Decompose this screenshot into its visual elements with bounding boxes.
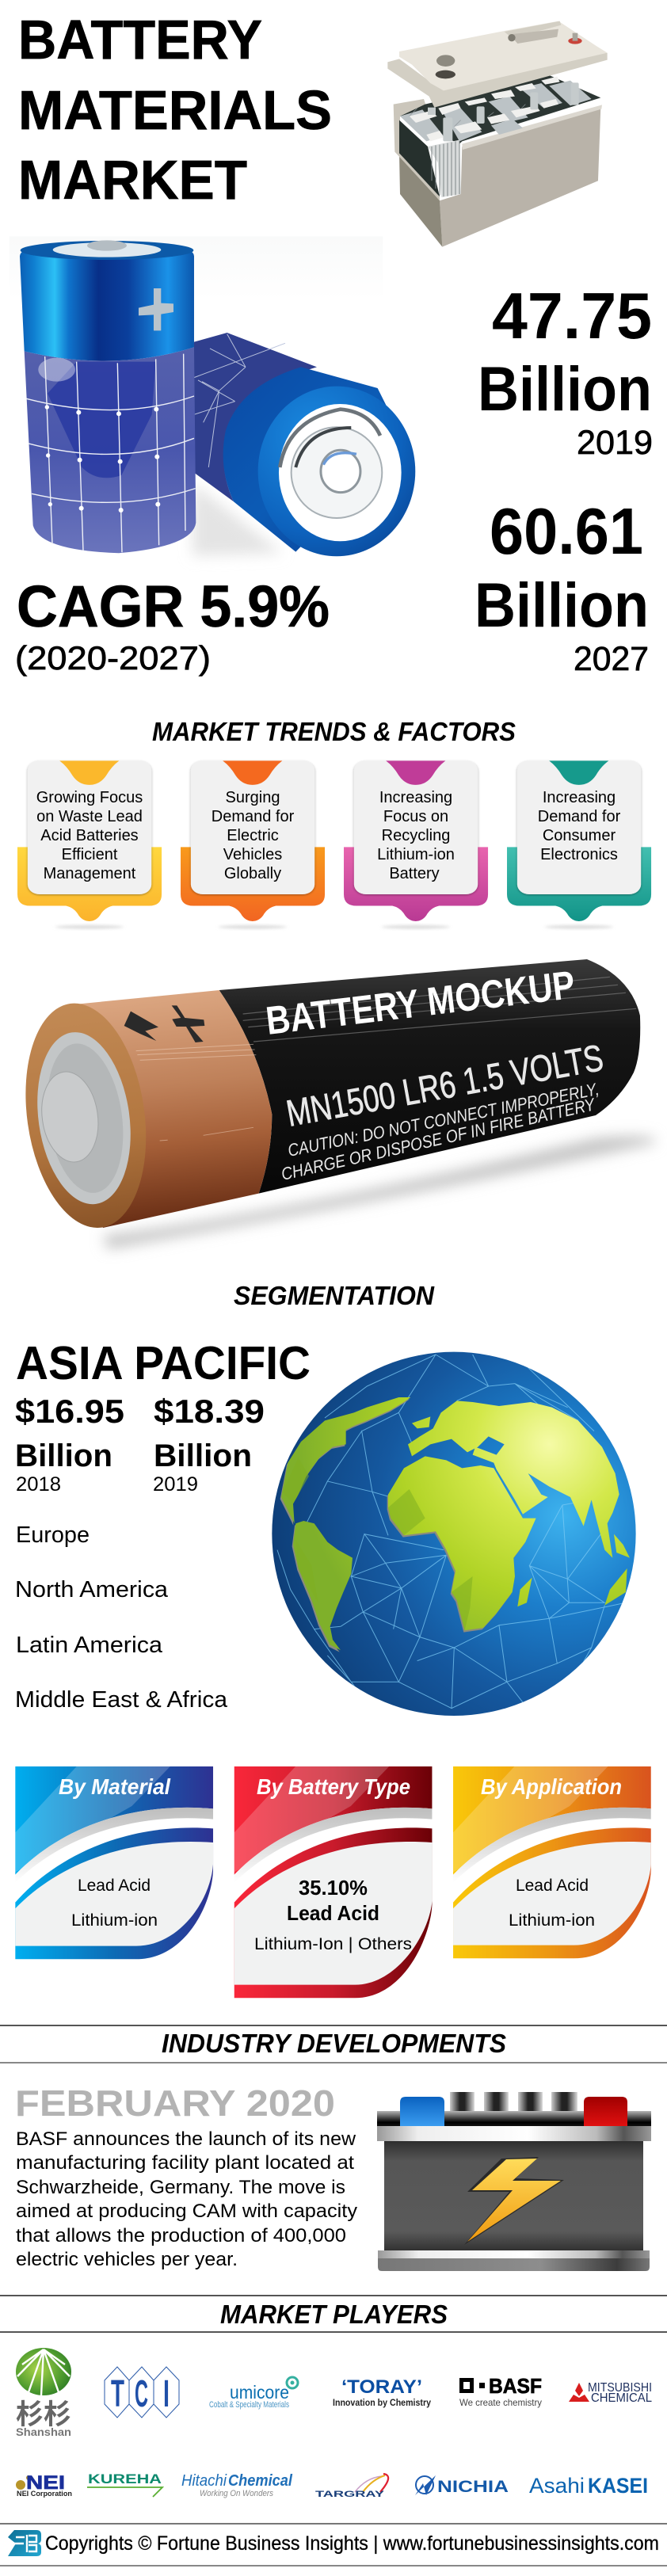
card: consumer electronics: Increasing bbox=[543, 789, 616, 806]
panel: by material: Lithium-ion bbox=[71, 1911, 158, 1930]
text block: BASF development: Schwarzheide, Germany. The move is bbox=[16, 2177, 345, 2198]
logo: NEI Corporation: NEI Corporation bbox=[17, 2490, 72, 2498]
card: recycling lithium-ion: Recycling bbox=[382, 827, 450, 844]
logo: TCI: C bbox=[135, 2373, 148, 2415]
logo: TCI: I bbox=[163, 2373, 170, 2415]
CAGR bbox=[15, 574, 330, 676]
date: February 2020: FEBRUARY 2020 bbox=[15, 2083, 335, 2124]
market size 2027 bbox=[475, 494, 649, 678]
logo: TCI bbox=[105, 2367, 179, 2418]
CAGR: (2020-2027) bbox=[15, 639, 211, 676]
logo: Hitachi Chemical: Working On Wonders bbox=[200, 2489, 273, 2498]
panel: by application: Lithium-ion bbox=[509, 1911, 595, 1930]
continents bbox=[281, 1397, 630, 1650]
text block: BASF development: that allows the production of 400,000 bbox=[16, 2225, 346, 2246]
text block: BASF development bbox=[16, 2128, 357, 2270]
panel: by battery type: 35.10% bbox=[299, 1876, 368, 1900]
illustration: AA battery mockup: CAUTION: DO NOT CONNECT IMPROPERLY, bbox=[286, 1079, 600, 1160]
card: recycling lithium-ion: Focus on bbox=[383, 808, 448, 825]
logo: Asahi Kasei bbox=[529, 2474, 648, 2498]
card: consumer electronics: Consumer bbox=[543, 827, 616, 844]
heading: industry developments: INDUSTRY DEVELOPMENTS bbox=[162, 2029, 506, 2058]
icon: minus and plus marks bbox=[124, 1005, 204, 1042]
text block: BASF development: BASF announces the launch of its new bbox=[16, 2128, 356, 2150]
logo: BASF bbox=[459, 2374, 542, 2408]
card: consumer electronics: Electronics bbox=[540, 846, 618, 863]
logo: TCI: T bbox=[111, 2373, 124, 2415]
panel: Asia Pacific figures: Billion bbox=[154, 1439, 252, 1473]
panel: by battery type: By Battery Type bbox=[257, 1774, 410, 1799]
text block: BASF development: electric vehicles per year. bbox=[16, 2249, 238, 2270]
logo: Shanshan: 杉杉 bbox=[16, 2399, 71, 2430]
logo: Hitachi Chemical: Hitachi bbox=[181, 2472, 227, 2490]
panel: Asia Pacific figures: 2018 bbox=[16, 1473, 61, 1496]
right lying battery bbox=[194, 333, 415, 556]
card: waste lead acid: Management bbox=[44, 865, 136, 882]
panel: trend cards bbox=[17, 760, 651, 929]
logo: BASF: We create chemistry bbox=[459, 2397, 542, 2408]
card: waste lead acid: Acid Batteries bbox=[40, 827, 139, 844]
left standing battery bbox=[20, 240, 196, 553]
illustration: AA battery mockup: BATTERY MOCKUP bbox=[264, 962, 577, 1043]
list: other regions: Middle East & Africa bbox=[15, 1687, 228, 1713]
logo: Shanshan: Shanshan bbox=[16, 2425, 71, 2438]
logo: Asahi Kasei: Asahi bbox=[529, 2474, 585, 2498]
logo: Kureha bbox=[87, 2471, 162, 2497]
title: MATERIALS bbox=[18, 79, 332, 141]
battery plates bbox=[400, 77, 592, 197]
card: consumer electronics bbox=[507, 760, 651, 929]
card: electric vehicles: Vehicles bbox=[223, 846, 282, 863]
logo: Hitachi Chemical: Chemical bbox=[228, 2472, 292, 2490]
CAGR: CAGR 5.9% bbox=[17, 574, 330, 639]
panel: Asia Pacific figures: ASIA PACIFIC bbox=[16, 1337, 311, 1389]
panel: by application: By Application bbox=[481, 1774, 622, 1799]
panel: Asia Pacific figures: $16.95 bbox=[15, 1393, 124, 1430]
card: waste lead acid: Efficient bbox=[62, 846, 118, 863]
logo: NEI Corporation: NEI bbox=[26, 2472, 65, 2494]
battery cover bbox=[387, 53, 608, 108]
icon: plus sign bbox=[139, 288, 173, 330]
text block: BASF development: manufacturing facility plant located at bbox=[16, 2152, 354, 2174]
heading: market trends and factors: MARKET TRENDS & FACTORS bbox=[152, 717, 516, 746]
card: waste lead acid bbox=[17, 760, 162, 929]
heading: market players: MARKET PLAYERS bbox=[220, 2300, 448, 2329]
logo: BASF: BASF bbox=[489, 2374, 542, 2398]
card: electric vehicles: Demand for bbox=[212, 808, 295, 825]
panel: by battery type: Lead Acid bbox=[287, 1901, 379, 1925]
logo: Nichia: NICHIA bbox=[437, 2478, 509, 2496]
title bbox=[18, 9, 332, 211]
logo: Mitsubishi Chemical: CHEMICAL bbox=[591, 2391, 652, 2405]
icon: car battery with lightning bolt bbox=[377, 2092, 651, 2271]
list: other regions: Europe bbox=[16, 1522, 90, 1548]
list: other regions: North America bbox=[15, 1577, 169, 1602]
logo: umicore bbox=[209, 2377, 298, 2410]
card: recycling lithium-ion bbox=[344, 760, 488, 929]
panel: by application: Lead Acid bbox=[516, 1877, 589, 1895]
footer logo bbox=[8, 2530, 41, 2556]
card: recycling lithium-ion: Battery bbox=[389, 865, 440, 882]
card: electric vehicles: Surging bbox=[226, 789, 280, 806]
card: recycling lithium-ion: Increasing bbox=[379, 789, 452, 806]
title: BATTERY bbox=[18, 9, 262, 70]
panel: by material bbox=[15, 1766, 213, 1959]
panel: blue solar batteries photo bbox=[10, 236, 415, 556]
market size 2027: 2027 bbox=[574, 640, 649, 678]
logo: Hitachi Chemical bbox=[181, 2472, 292, 2498]
logo: Mitsubishi Chemical: MITSUBISHI bbox=[588, 2381, 652, 2395]
logo: Asahi Kasei: KASEI bbox=[588, 2474, 648, 2498]
title: MARKET bbox=[18, 149, 247, 211]
panel: by material: By Material bbox=[59, 1774, 171, 1799]
illustration: AA battery mockup bbox=[12, 959, 656, 1249]
card: consumer electronics: Demand for bbox=[538, 808, 621, 825]
card: waste lead acid: Growing Focus bbox=[36, 789, 143, 806]
logo: NEI Corporation bbox=[16, 2472, 72, 2498]
logo: Toray: ‘TORAY’ bbox=[341, 2376, 422, 2398]
list: other regions: Latin America bbox=[16, 1633, 163, 1658]
list: other regions bbox=[15, 1522, 228, 1713]
market size 2019: Billion bbox=[478, 353, 652, 424]
panel: Asia Pacific figures bbox=[15, 1337, 311, 1496]
market size 2019: 47.75 bbox=[492, 279, 652, 352]
logo: Kureha: KUREHA bbox=[88, 2471, 162, 2486]
panel: by application bbox=[453, 1766, 651, 1958]
market size 2027: 60.61 bbox=[490, 494, 643, 568]
logo: Shanshan bbox=[16, 2348, 71, 2438]
panel: Asia Pacific figures: Billion bbox=[15, 1439, 112, 1473]
logo: Toray bbox=[333, 2376, 431, 2408]
panel: by battery type: Lithium-Ion | Others bbox=[254, 1935, 412, 1953]
logo: umicore: umicore bbox=[230, 2382, 289, 2403]
icon: lead acid battery with lifted cover bbox=[387, 21, 608, 247]
logo: Targray bbox=[315, 2474, 388, 2499]
card: electric vehicles bbox=[181, 760, 325, 929]
logo: Nichia bbox=[415, 2475, 509, 2496]
panel: Asia Pacific figures: 2019 bbox=[153, 1473, 198, 1496]
shadow under batteries bbox=[192, 483, 283, 556]
illustration: AA battery mockup: CHARGE OR DISPOSE OF IN FIRE BATTERY bbox=[280, 1094, 597, 1184]
illustration: globe bbox=[272, 1352, 636, 1716]
logo: umicore: Cobalt & Specialty Materials bbox=[209, 2400, 289, 2410]
market size 2019 bbox=[478, 279, 653, 462]
panel: by material: Lead Acid bbox=[78, 1877, 151, 1895]
logo: Toray: Innovation by Chemistry bbox=[333, 2397, 431, 2408]
logo: Mitsubishi Chemical bbox=[569, 2381, 652, 2405]
panel: by battery type bbox=[234, 1766, 432, 1998]
card: recycling lithium-ion: Lithium-ion bbox=[377, 846, 455, 863]
logo: Targray: TARGRAY bbox=[315, 2490, 385, 2499]
card: waste lead acid: on Waste Lead bbox=[36, 808, 143, 825]
text block: BASF development: aimed at producing CAM with capacity bbox=[16, 2201, 357, 2222]
heading: segmentation: SEGMENTATION bbox=[234, 1281, 435, 1310]
market size 2019: 2019 bbox=[577, 424, 653, 462]
card: electric vehicles: Electric bbox=[227, 827, 279, 844]
card: electric vehicles: Globally bbox=[224, 865, 281, 882]
panel: Asia Pacific figures: $18.39 bbox=[154, 1393, 265, 1430]
market size 2027: Billion bbox=[475, 570, 649, 640]
